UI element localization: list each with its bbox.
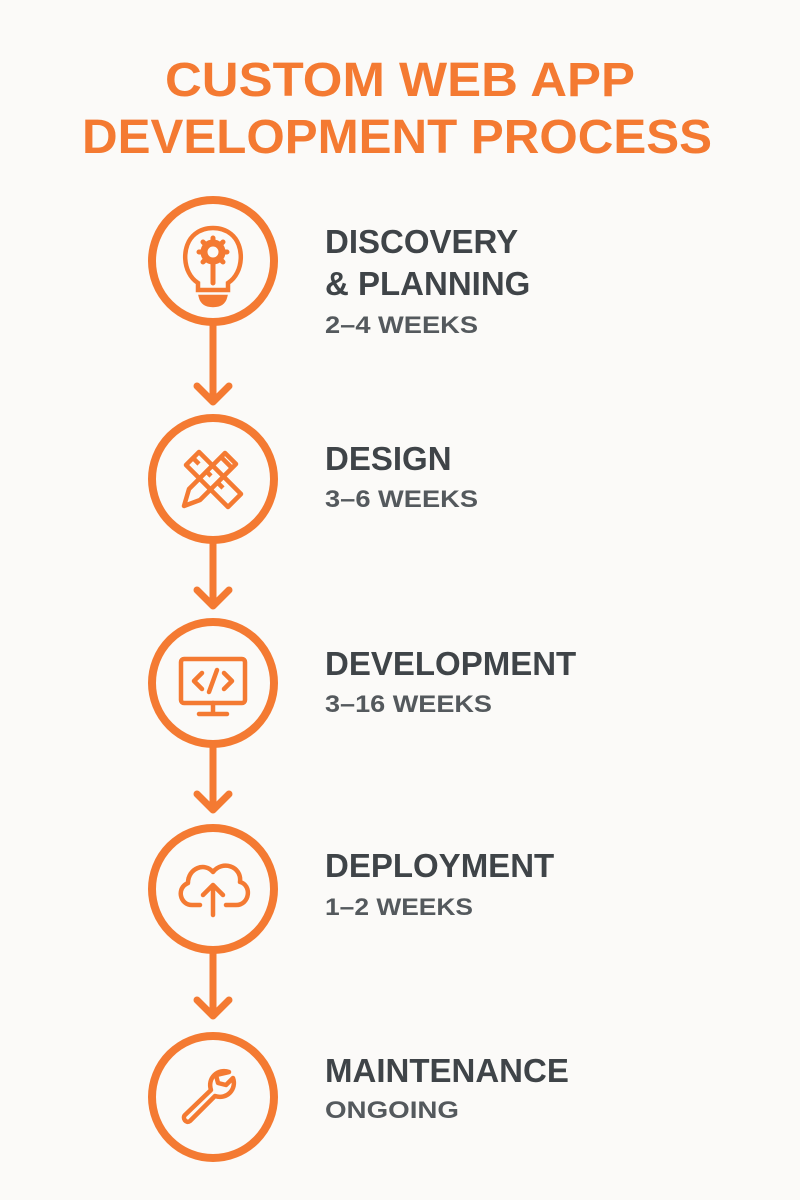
text: maintenance: MAINTENANCE bbox=[325, 1052, 569, 1089]
icon: monitor code bbox=[152, 622, 274, 744]
icon: wrench bbox=[152, 1036, 274, 1158]
step 1: discovery bbox=[152, 200, 530, 339]
text: discovery: & PLANNING bbox=[325, 265, 530, 302]
title bbox=[82, 54, 712, 164]
title: DEVELOPMENT PROCESS bbox=[82, 111, 712, 164]
title: CUSTOM WEB APP bbox=[165, 54, 635, 107]
text: development bbox=[325, 645, 576, 718]
text: development: DEVELOPMENT bbox=[325, 645, 576, 682]
text: development: 3–16 WEEKS bbox=[325, 691, 492, 718]
text: maintenance: ONGOING bbox=[325, 1097, 459, 1124]
step 4: deployment bbox=[152, 828, 554, 950]
text: design: 3–6 WEEKS bbox=[325, 486, 478, 513]
icon: lightbulb gear bbox=[152, 200, 274, 322]
arrows bbox=[197, 323, 229, 1016]
text: maintenance bbox=[325, 1052, 569, 1124]
step 3: development bbox=[152, 622, 576, 744]
text: deployment: 1–2 WEEKS bbox=[325, 894, 473, 921]
text: discovery: DISCOVERY bbox=[325, 223, 518, 260]
text: design bbox=[325, 440, 478, 513]
text: deployment bbox=[325, 847, 554, 921]
icon: pencil ruler bbox=[152, 418, 274, 540]
step 2: design bbox=[152, 418, 478, 540]
text: discovery: 2–4 WEEKS bbox=[325, 312, 478, 339]
text: discovery bbox=[325, 223, 530, 339]
icon: cloud upload bbox=[152, 828, 274, 950]
text: design: DESIGN bbox=[325, 440, 452, 477]
text: deployment: DEPLOYMENT bbox=[325, 847, 554, 884]
step 5: maintenance bbox=[152, 1036, 569, 1158]
